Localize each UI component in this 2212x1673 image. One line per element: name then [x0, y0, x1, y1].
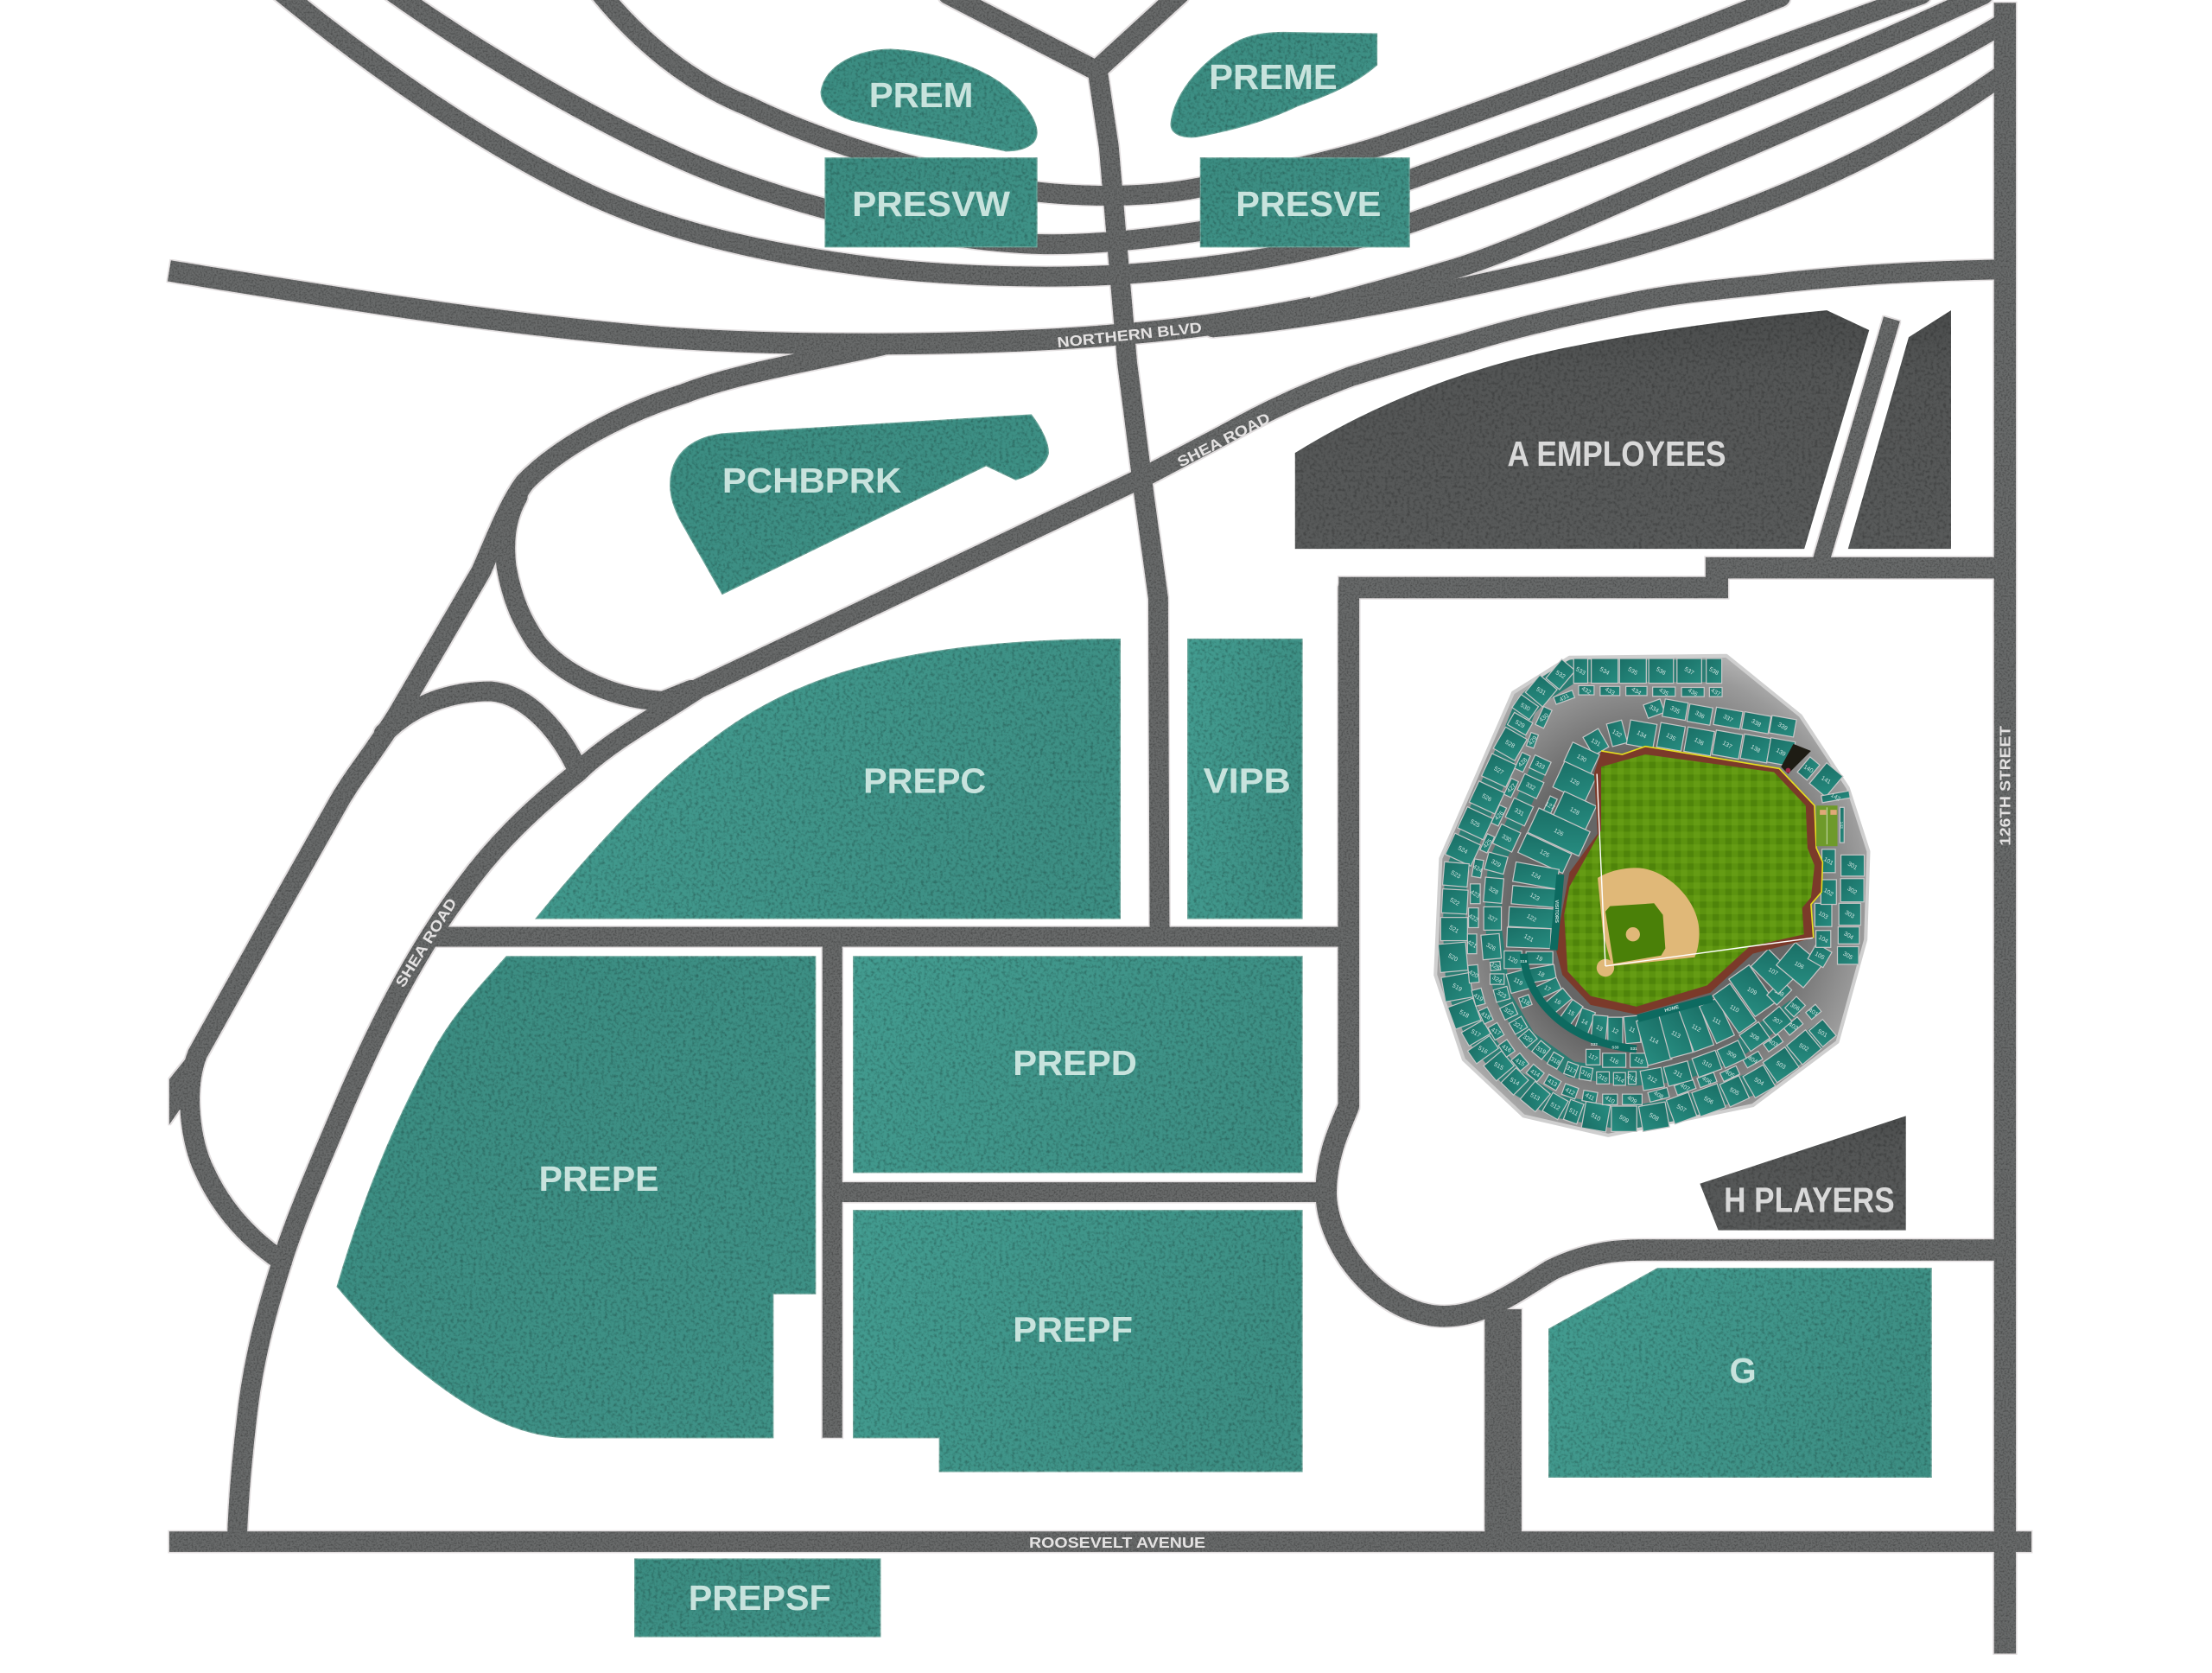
seating sections: 530: [1519, 703, 1531, 713]
lot: PREME: [1171, 33, 1376, 137]
seating sections: 422: [1467, 913, 1479, 924]
batter's eye: [1781, 744, 1811, 774]
seating sections: 534: [1599, 666, 1611, 677]
lot: PREM: PREM: [869, 75, 974, 115]
seating sections: 501: [1816, 1028, 1828, 1039]
lot: PREPSF: PREPSF: [689, 1578, 831, 1618]
seating sections: 528: [1504, 740, 1516, 750]
seating sections: 106: [1793, 961, 1805, 971]
seating sections: [1438, 658, 1865, 1132]
seating sections: 326: [1484, 942, 1497, 952]
lot: employee annex: [1848, 310, 1951, 549]
seating sections: 308: [1748, 1032, 1760, 1042]
road label: Shea Road west: SHEA ROAD: [391, 895, 460, 990]
lot: PRESVW: [825, 158, 1037, 247]
road label: Roosevelt Avenue: ROOSEVELT AVENUE: [1029, 1534, 1205, 1551]
lot: PREPC: PREPC: [863, 761, 986, 801]
seating sections: 504: [1753, 1077, 1764, 1087]
seating sections: 321: [1512, 1021, 1524, 1031]
seating sections: 320: [1522, 1034, 1534, 1044]
seating sections: 415: [1514, 1058, 1526, 1068]
seating sections: 338: [1750, 718, 1762, 728]
lot: PREPSF: [635, 1559, 880, 1637]
lot: PCHBPRK: PCHBPRK: [722, 461, 902, 500]
seating sections: 533: [1574, 666, 1586, 677]
lot: PRESVE: [1200, 158, 1409, 247]
seating sections: 413: [1547, 1078, 1558, 1088]
road: Roosevelt Avenue: [169, 1531, 2031, 1552]
seating sections: 519: [1451, 983, 1463, 993]
seating sections: 508: [1648, 1112, 1660, 1123]
lot: G: G: [1730, 1351, 1757, 1390]
seating sections: 527: [1492, 766, 1504, 776]
lot: PREM: [821, 49, 1037, 151]
seating sections: 418: [1479, 1011, 1491, 1021]
lot: A EMPLOYEES: A EMPLOYEES: [1507, 434, 1726, 474]
seating sections: 110: [1728, 1004, 1740, 1015]
seating sections: 101: [1822, 856, 1834, 867]
seating sections: 127: [1544, 801, 1555, 811]
road: top arc 3: [281, 0, 1984, 277]
seating sections: 142: [1829, 792, 1841, 803]
seating sections: 11: [1628, 1026, 1637, 1034]
seating sections: 124: [1529, 871, 1541, 881]
road: 126th Street: [1994, 3, 2016, 1653]
seating sections: 434: [1630, 686, 1642, 697]
lot: PREPE: [337, 957, 816, 1438]
visitors dugout: VISITORS: [1554, 900, 1559, 923]
lot: PCHBPRK: [671, 415, 1048, 594]
seating sections: 330: [1500, 834, 1512, 844]
lot: A EMPLOYEES: [1295, 310, 1869, 549]
seating sections: 19: [1535, 954, 1543, 963]
seating sections: 317: [1565, 1065, 1577, 1075]
road: top arc 1: [597, 0, 1780, 195]
seating sections: 416: [1500, 1044, 1512, 1054]
road label: 126th Street: 126TH STREET: [1997, 725, 2014, 846]
premium ring band: S32: [1591, 1042, 1598, 1046]
seating sections: 426: [1494, 811, 1505, 822]
seating sections: 525: [1469, 819, 1481, 829]
seating sections: 107: [1767, 967, 1779, 977]
seating sections: 319: [1535, 1046, 1547, 1056]
seating sections: 130: [1575, 754, 1587, 764]
seating sections: 316: [1580, 1069, 1592, 1079]
seating sections: 104: [1817, 934, 1829, 945]
lot: PREPE: PREPE: [539, 1159, 658, 1199]
outfield grass: [1564, 754, 1815, 1007]
seating sections: 408: [1652, 1091, 1664, 1101]
seating sections: 305: [1842, 951, 1853, 962]
seating sections: 138: [1750, 744, 1761, 754]
seating sections: 132: [1611, 728, 1623, 739]
stadium shell: [1435, 656, 1868, 1135]
seating sections: 119: [1512, 977, 1523, 987]
home plate circle: [1597, 959, 1614, 976]
seating sections: 118: [1519, 997, 1530, 1007]
seating sections: 17: [1542, 985, 1552, 994]
seating sections: 123: [1529, 892, 1541, 902]
seating sections: 509: [1618, 1115, 1630, 1124]
seating sections: 412: [1564, 1087, 1576, 1097]
seating sections: 109: [1746, 986, 1758, 996]
seating sections: 407: [1679, 1083, 1691, 1093]
road: lot G street: [1484, 1309, 1522, 1542]
seating sections: 312: [1646, 1074, 1658, 1085]
seating sections: 103: [1817, 911, 1829, 921]
seating sections: 332: [1524, 782, 1536, 792]
bullpen: [1816, 805, 1838, 846]
lot: PREPF: PREPF: [1013, 1310, 1133, 1350]
seating sections: 502: [1798, 1043, 1809, 1053]
seating sections: 102: [1822, 887, 1834, 898]
lot: PREPD: PREPD: [1013, 1043, 1137, 1083]
seating sections: 515: [1492, 1061, 1504, 1072]
seating sections: 523: [1450, 870, 1461, 881]
stadium seating map: [1435, 656, 1868, 1135]
seating sections: 140: [1802, 764, 1814, 774]
seating sections: 311: [1672, 1069, 1683, 1079]
road: lot street 845: [823, 1182, 1333, 1202]
lot: PRESVW: PRESVW: [852, 184, 1010, 224]
seating sections: 331: [1513, 807, 1525, 817]
road: Shea Road: [237, 270, 2005, 1541]
road: Northern Blvd: [169, 270, 1312, 344]
seating sections: 117: [1587, 1053, 1599, 1063]
seating sections: 112: [1690, 1023, 1701, 1034]
road: stadium west street: [1326, 588, 2005, 1316]
seating sections: 115: [1633, 1056, 1644, 1066]
seating sections: 429: [1528, 735, 1539, 747]
premium ring band: S31: [1630, 1046, 1637, 1051]
seating sections: 417: [1490, 1027, 1502, 1037]
seating sections: 526: [1481, 793, 1492, 804]
seating sections: 430: [1538, 712, 1550, 723]
seating sections: 537: [1683, 666, 1695, 677]
seating sections: 134: [1636, 730, 1647, 741]
seating sections: 536: [1655, 666, 1667, 677]
seating sections: 128: [1568, 806, 1580, 817]
seating sections: 108: [1773, 988, 1785, 998]
seating sections: 322: [1503, 1007, 1515, 1017]
seating sections: 125: [1539, 849, 1550, 859]
road: loop: [505, 497, 691, 701]
seating sections: 105: [1814, 951, 1826, 962]
seating sections: 436: [1687, 688, 1699, 698]
lot: PREME: PREME: [1209, 57, 1338, 97]
seating sections: 121: [1522, 933, 1535, 944]
seating sections: 514: [1509, 1077, 1520, 1087]
seating sections: 431: [1559, 693, 1571, 703]
seating sections: 437: [1709, 688, 1721, 698]
seating sections: 503: [1775, 1060, 1787, 1071]
seating sections: 136: [1693, 737, 1705, 747]
seating sections: 333: [1534, 760, 1546, 771]
home dugout: [1637, 995, 1713, 1022]
seating sections: 516: [1477, 1046, 1489, 1055]
seating sections: 524: [1457, 845, 1468, 856]
seating sections: 517: [1470, 1028, 1482, 1039]
infield dirt: [1598, 868, 1700, 966]
seating sections: 306: [1789, 1002, 1801, 1013]
seating sections: 505: [1728, 1087, 1740, 1097]
seating sections: 329: [1490, 859, 1502, 869]
seating sections: 420: [1467, 970, 1479, 980]
lot: PREPC: [536, 639, 1120, 919]
road: cross street 664: [430, 927, 1358, 947]
seating sections: 421: [1465, 939, 1478, 950]
lot: G: [1549, 1269, 1931, 1477]
lot: VIPB: [1188, 639, 1302, 919]
seating sections: 405: [1724, 1069, 1735, 1079]
warning track: [1555, 747, 1822, 1015]
seating sections: 513: [1529, 1092, 1541, 1103]
seating sections: 409: [1626, 1095, 1637, 1105]
road: lot street 590: [823, 937, 842, 1438]
seating sections: 529: [1514, 719, 1526, 729]
seating sections: 309: [1726, 1050, 1737, 1060]
lot: PREPF: [854, 1211, 1302, 1472]
seating sections: 435: [1657, 687, 1669, 697]
seating sections: 131: [1590, 738, 1601, 748]
seating sections: 141: [1820, 775, 1832, 786]
lot: VIPB: VIPB: [1204, 761, 1291, 801]
seating sections: 129: [1568, 777, 1580, 787]
seating sections: 143: [1839, 822, 1844, 829]
road: Y junction: [948, 0, 1179, 937]
seating sections: 535: [1627, 666, 1638, 677]
lot: PRESVE: PRESVE: [1236, 184, 1381, 224]
visitors dugout: [1550, 875, 1564, 951]
seating sections: 139: [1775, 747, 1787, 758]
seating sections: 402: [1787, 1021, 1799, 1032]
seating sections: 111: [1711, 1016, 1722, 1027]
seating sections: 12: [1611, 1027, 1619, 1035]
lot: H PLAYERS: H PLAYERS: [1724, 1180, 1895, 1219]
seating ring underlay: [1454, 671, 1822, 1119]
seating sections: 135: [1665, 733, 1676, 742]
seating sections: 301: [1847, 862, 1858, 871]
seating sections: 518: [1458, 1009, 1470, 1020]
premium ring band: S33: [1611, 1045, 1619, 1049]
seating sections: 336: [1694, 710, 1706, 721]
seating sections: 302: [1846, 886, 1858, 896]
road: west spur: [169, 1051, 200, 1124]
seating sections: 419: [1472, 993, 1484, 1003]
seating sections: 520: [1446, 953, 1459, 964]
seating sections: 314: [1613, 1074, 1625, 1085]
seating sections: 404: [1746, 1055, 1758, 1066]
seating sections: 507: [1675, 1104, 1688, 1114]
seating sections: 304: [1842, 931, 1854, 941]
seating sections: 414: [1529, 1069, 1541, 1078]
seating sections: 323: [1496, 989, 1507, 1000]
seating sections: 433: [1604, 686, 1616, 697]
road: ramp 4: [1213, 22, 2005, 328]
seating sections: 531: [1535, 686, 1547, 697]
seating sections: 116: [1608, 1056, 1619, 1066]
seating sections: 303: [1844, 910, 1855, 920]
home dugout: HOME: [1664, 1005, 1680, 1014]
seating sections: 512: [1549, 1102, 1560, 1112]
road: ramp 5: [1213, 73, 2005, 328]
seating sections: 423: [1469, 889, 1481, 900]
seating sections: 15: [1567, 1009, 1575, 1018]
pitcher's mound: [1626, 927, 1640, 941]
road label: Shea Road east: SHEA ROAD: [1174, 409, 1273, 471]
seating sections: 122: [1525, 913, 1537, 924]
seating sections: 120: [1507, 955, 1518, 965]
premium ring band: [1520, 954, 1637, 1051]
seating sections: 428: [1517, 757, 1529, 768]
road: top arc 2: [392, 0, 1922, 245]
seating sections: 315: [1597, 1073, 1609, 1084]
seating sections: 16: [1553, 998, 1562, 1007]
road: service stub: [1821, 319, 1891, 560]
seating sections: 411: [1584, 1092, 1595, 1103]
foul lines: [1597, 774, 1813, 966]
seating sections: 510: [1590, 1112, 1601, 1123]
seating sections: 334: [1648, 704, 1660, 715]
seating sections: 14: [1580, 1018, 1589, 1027]
seating sections: 318: [1549, 1056, 1560, 1066]
seating sections: 13: [1594, 1024, 1604, 1033]
seating sections: 324: [1491, 975, 1503, 985]
lot: PREPD: [854, 957, 1302, 1173]
lot: H PLAYERS: [1700, 1116, 1906, 1231]
seating sections: 18: [1536, 970, 1545, 979]
seating sections: 427: [1506, 783, 1517, 794]
seating sections: 410: [1604, 1095, 1616, 1105]
road label: Northern Blvd: NORTHERN BLVD: [1056, 319, 1203, 351]
seating sections: 506: [1702, 1096, 1714, 1106]
seating sections: 137: [1721, 741, 1733, 750]
seating sections: 113: [1670, 1030, 1681, 1040]
seating sections: 335: [1669, 705, 1681, 716]
seating sections: 432: [1580, 686, 1592, 697]
seating sections: 521: [1448, 925, 1459, 935]
premium ring band: S19: [1520, 959, 1528, 964]
road: Northern link and west diagonal: [190, 346, 881, 1262]
seating sections: 307: [1771, 1016, 1783, 1027]
outfield wall: [1601, 747, 1822, 938]
seating sections: 532: [1554, 670, 1567, 680]
road: inner arc: [384, 691, 578, 772]
seating sections: 511: [1567, 1108, 1579, 1117]
seating sections: 403: [1767, 1039, 1779, 1049]
seating sections: 425: [1482, 838, 1494, 849]
seating sections: 406: [1700, 1076, 1713, 1086]
seating sections: 538: [1707, 666, 1719, 677]
seating sections: 424: [1471, 864, 1484, 875]
seating sections: 337: [1722, 714, 1733, 724]
infield grass: [1605, 903, 1665, 964]
seating sections: 327: [1486, 914, 1498, 925]
seating sections: 401: [1808, 1008, 1819, 1018]
seating sections: 339: [1777, 722, 1789, 732]
seating sections: 325: [1489, 962, 1501, 972]
seating sections: 328: [1487, 886, 1499, 896]
seating sections: 310: [1700, 1059, 1713, 1070]
seating sections: 313: [1626, 1073, 1637, 1084]
road: stadium north street: [1338, 557, 2005, 598]
seating sections: 522: [1448, 897, 1460, 907]
seating sections: 126: [1553, 828, 1564, 838]
seating sections: 114: [1648, 1036, 1659, 1046]
